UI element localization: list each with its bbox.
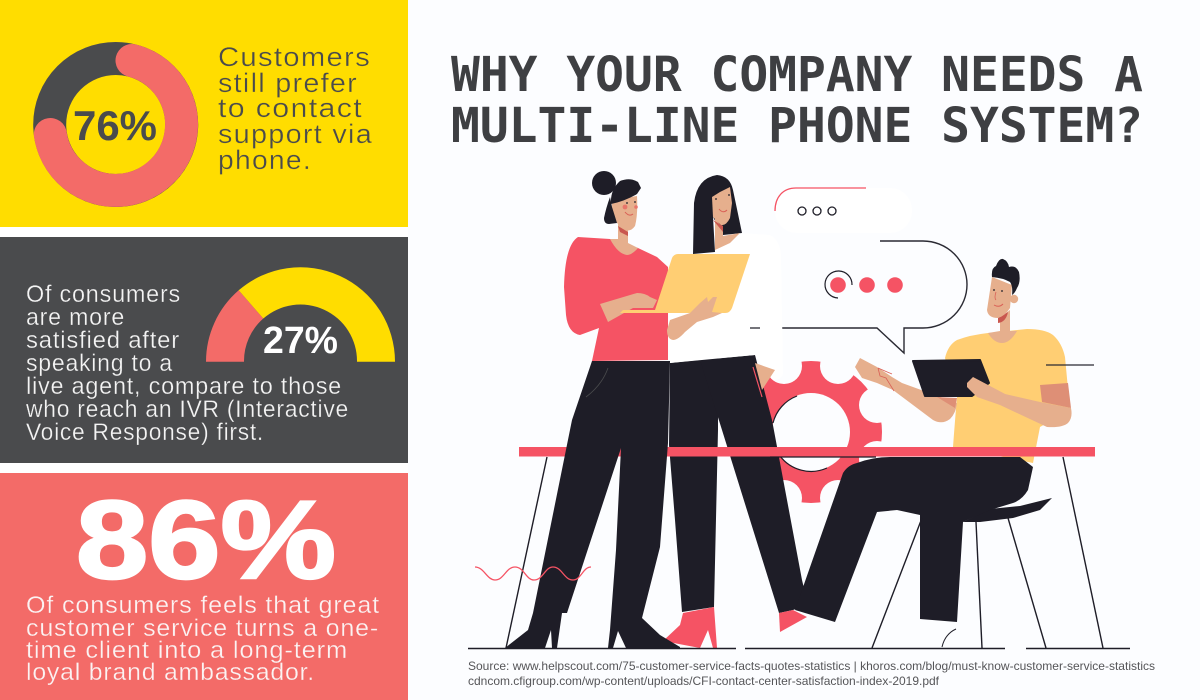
panel: 76% prefer phone [0, 0, 408, 227]
text: customers prefer phone: support via [218, 119, 373, 149]
text: live agent satisfaction: Voice Response) first. [26, 419, 264, 446]
source text [468, 660, 1155, 688]
wavy line [475, 567, 591, 580]
text: customers prefer phone: to contact [218, 93, 363, 123]
text: customers prefer phone [218, 42, 373, 175]
text: live agent satisfaction: satisfied after [26, 327, 180, 354]
small speech bubble [775, 188, 912, 233]
text: great customer service: loyal brand ambassador. [26, 659, 315, 686]
woman with hair bun [505, 171, 680, 648]
donut chart: 76% [50, 58, 182, 190]
text: live agent satisfaction: who reach an IVR (Interactive [25, 396, 349, 423]
text: live agent satisfaction: speaking to a [26, 350, 173, 377]
panel: 86% brand ambassador [0, 473, 408, 700]
gauge chart: 27%: 27% [263, 320, 338, 362]
gauge chart: 27% [206, 267, 395, 362]
text: great customer service: time client into a long-term [26, 637, 348, 664]
woman with laptop: legs and shirt [663, 175, 808, 648]
large speech bubble [750, 241, 967, 353]
text: great customer service: customer service turns a one- [26, 615, 379, 642]
text: live agent satisfaction: Of consumers [26, 281, 181, 308]
table and chair [506, 447, 1103, 648]
source text: cdncom.cfigroup.com/wp-content/uploads/CFI-contact-center-satisfaction-index-2019.pdf [468, 675, 940, 688]
text: customers prefer phone: Customers [218, 42, 371, 72]
title [451, 48, 1143, 154]
text: live agent satisfaction: live agent, compare to those [26, 373, 342, 400]
panel: 27% more satisfied [0, 237, 408, 463]
donut chart: 76%: 76% [73, 102, 157, 149]
title: WHY YOUR COMPANY NEEDS A [451, 48, 1143, 103]
ground line [468, 648, 1130, 650]
title: MULTI-LINE PHONE SYSTEM? [451, 99, 1143, 154]
text: customers prefer phone: phone. [218, 145, 312, 175]
man with tablet [795, 259, 1094, 647]
text: great customer service [26, 592, 380, 686]
laptop [620, 254, 750, 313]
arm holding laptop [667, 297, 722, 340]
text: customers prefer phone: still prefer [218, 68, 358, 98]
text: live agent satisfaction [25, 281, 349, 446]
gear [740, 348, 895, 516]
source text: Source: www.helpscout.com/75-customer-service-facts-quotes-statistics | khoros.com/blog/must-know-customer-service-statistics [468, 660, 1155, 673]
text: live agent satisfaction: are more [26, 304, 125, 331]
text: great customer service: Of consumers feels that great [26, 592, 380, 619]
illustration: team with phone system [468, 171, 1130, 648]
big stat: 86%: 86% [76, 478, 336, 602]
